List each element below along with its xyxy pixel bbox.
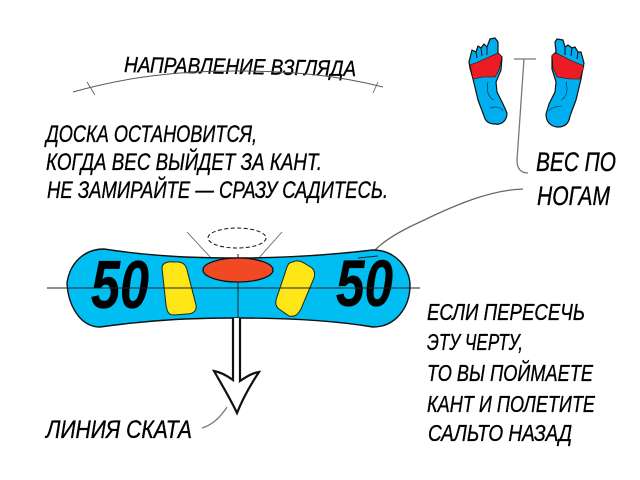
- icon: left foot: [469, 38, 507, 124]
- bracket: feet to label: [514, 59, 536, 173]
- label: fall line: ЛИНИЯ СКАТА: [44, 416, 192, 444]
- heading: gaze direction: НАПРАВЛЕНИЕ ВЗГЛЯДА: [124, 52, 356, 81]
- text block: crossing the line: ЕСЛИ ПЕРЕСЕЧЬ: [427, 299, 585, 325]
- text block: board stops: ДОСКА ОСТАНОВИТСЯ,: [44, 121, 257, 148]
- balance lines: [47, 254, 420, 320]
- dashed ellipse: head position: [208, 228, 266, 248]
- leader: fall line: [202, 407, 227, 428]
- label: weight on feet: [536, 147, 616, 211]
- label: weight on feet: НОГАМ: [537, 181, 610, 211]
- text block: board stops: НЕ ЗАМИРАЙТЕ — СРАЗУ САДИТЕСЬ.: [47, 176, 388, 204]
- text block: crossing the line: ТО ВЫ ПОЙМАЕТЕ: [427, 359, 594, 386]
- text block: board stops: КОГДА ВЕС ВЫЙДЕТ ЗА КАНТ.: [46, 148, 322, 176]
- icon: right foot: [546, 39, 584, 127]
- text block: crossing the line: КАНТ И ПОЛЕТИТЕ: [427, 391, 596, 417]
- heading: gaze direction: [73, 52, 383, 95]
- snowboard: [67, 246, 410, 327]
- number: left 50: 50: [91, 247, 149, 323]
- leader line: label to board: [375, 189, 523, 250]
- binding: right: [276, 261, 315, 316]
- text block: crossing the line: [427, 299, 596, 446]
- number: right 50: 50: [336, 246, 393, 320]
- view cone lines: [187, 232, 282, 259]
- text block: board stops: [44, 121, 388, 204]
- binding: left: [162, 262, 196, 315]
- label: weight on feet: ВЕС ПО: [536, 147, 616, 177]
- center of gravity: [203, 258, 273, 282]
- text block: crossing the line: САЛЬТО НАЗАД: [428, 420, 572, 446]
- text block: crossing the line: ЭТУ ЧЕРТУ,: [427, 329, 523, 355]
- arrow: fall line: [214, 318, 259, 413]
